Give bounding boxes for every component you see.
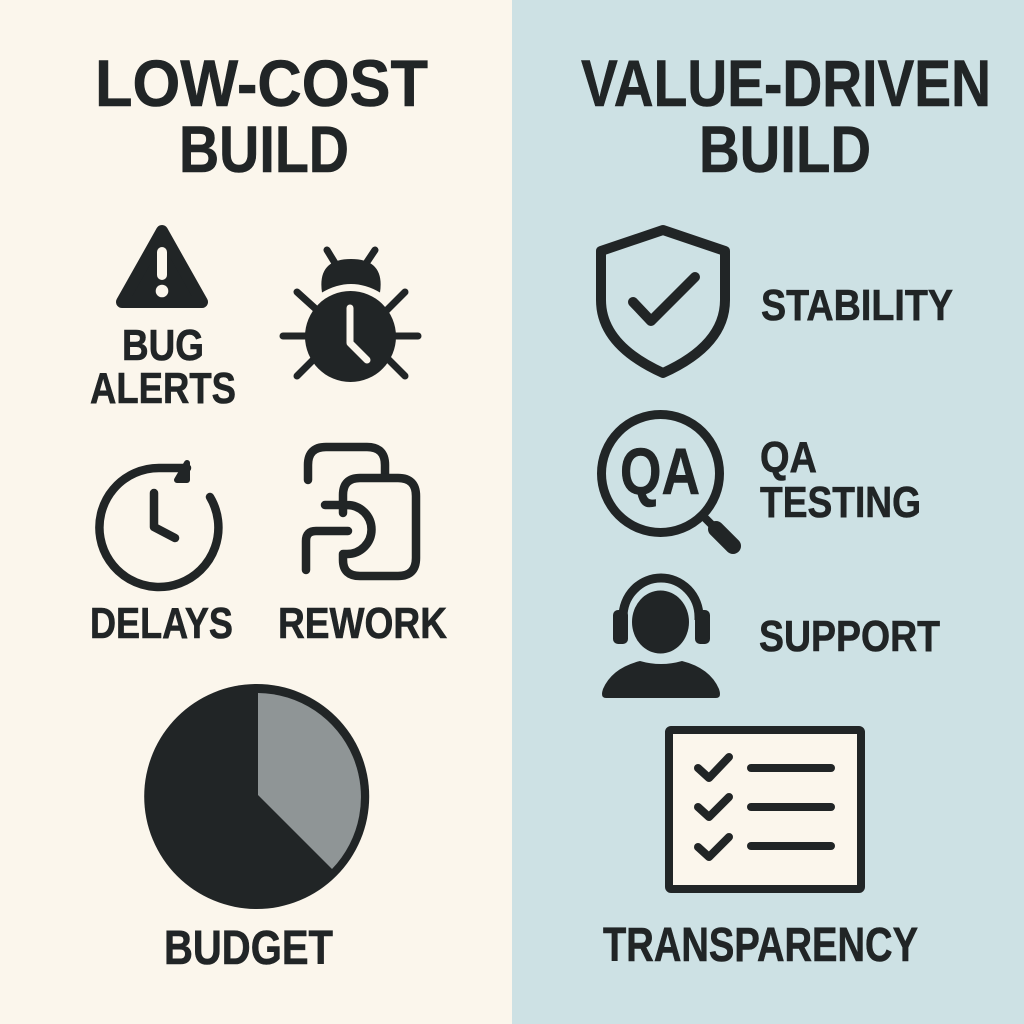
- label: budget: BUDGET: [164, 922, 333, 975]
- icon: rework linked shapes: [306, 447, 416, 576]
- icon: warning triangle: [122, 231, 202, 302]
- label: bug alerts: [90, 321, 236, 413]
- heading: low-cost build: LOW-COST: [95, 46, 428, 120]
- icon: QA magnifier: QA: [620, 434, 700, 508]
- icon: support headset person: [602, 578, 720, 698]
- icon: checklist card: [669, 730, 861, 889]
- heading: value-driven build: BUILD: [699, 112, 871, 186]
- label: support: SUPPORT: [759, 612, 940, 661]
- label: transparency: TRANSPARENCY: [603, 919, 918, 972]
- icon: delays clock: [99, 463, 218, 587]
- label: rework: REWORK: [278, 599, 447, 648]
- heading: low-cost build: BUILD: [179, 112, 349, 186]
- icon: bug with clock: [283, 250, 418, 382]
- heading: value-driven build: [581, 46, 991, 186]
- label: QA testing: TESTING: [760, 478, 921, 527]
- chart: budget pie: [144, 684, 369, 909]
- panel: value-driven build: [512, 0, 1024, 1024]
- label: QA testing: [760, 433, 921, 527]
- label: delays: DELAYS: [90, 599, 233, 648]
- panel: low-cost build: [0, 0, 512, 1024]
- icon: QA magnifier: [602, 414, 733, 546]
- label: bug alerts: ALERTS: [90, 364, 236, 413]
- label: QA testing: QA: [760, 433, 817, 482]
- heading: low-cost build: [95, 46, 428, 186]
- label: stability: STABILITY: [761, 281, 953, 330]
- label: bug alerts: BUG: [122, 321, 204, 370]
- icon: shield check: [601, 230, 725, 373]
